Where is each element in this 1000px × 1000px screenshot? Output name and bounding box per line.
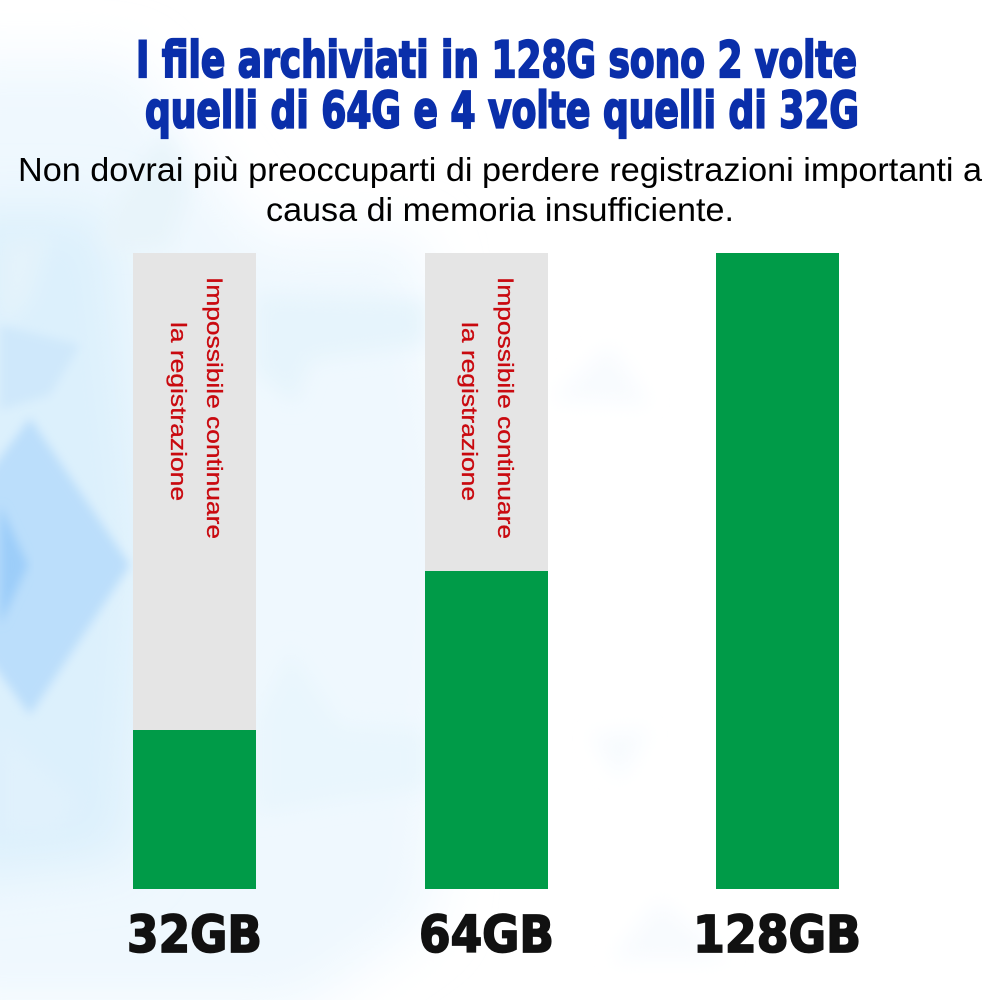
note: 64GB recording stops: Impossibile continuare — [493, 277, 518, 539]
capacity labels: 64GB — [419, 906, 554, 965]
note: 64GB recording stops: la registrazione — [457, 322, 482, 501]
bar: 32GB — [133, 253, 256, 889]
title — [136, 31, 859, 140]
subtitle text — [18, 151, 983, 228]
bar: 128GB — [716, 253, 839, 889]
subtitle text: Non dovrai più preoccuparti di perdere registrazioni importanti a — [18, 151, 983, 188]
note: 32GB recording stops — [166, 277, 227, 539]
subtitle text: causa di memoria insufficiente. — [266, 191, 734, 228]
note: 32GB recording stops: la registrazione — [166, 322, 191, 501]
capacity labels: 128GB — [693, 906, 861, 965]
note: 32GB recording stops: Impossibile continuare — [202, 277, 227, 539]
capacity labels: 32GB — [127, 906, 262, 965]
bar: 64GB — [425, 253, 548, 889]
capacity labels — [127, 906, 861, 965]
note: 64GB recording stops — [457, 277, 518, 539]
